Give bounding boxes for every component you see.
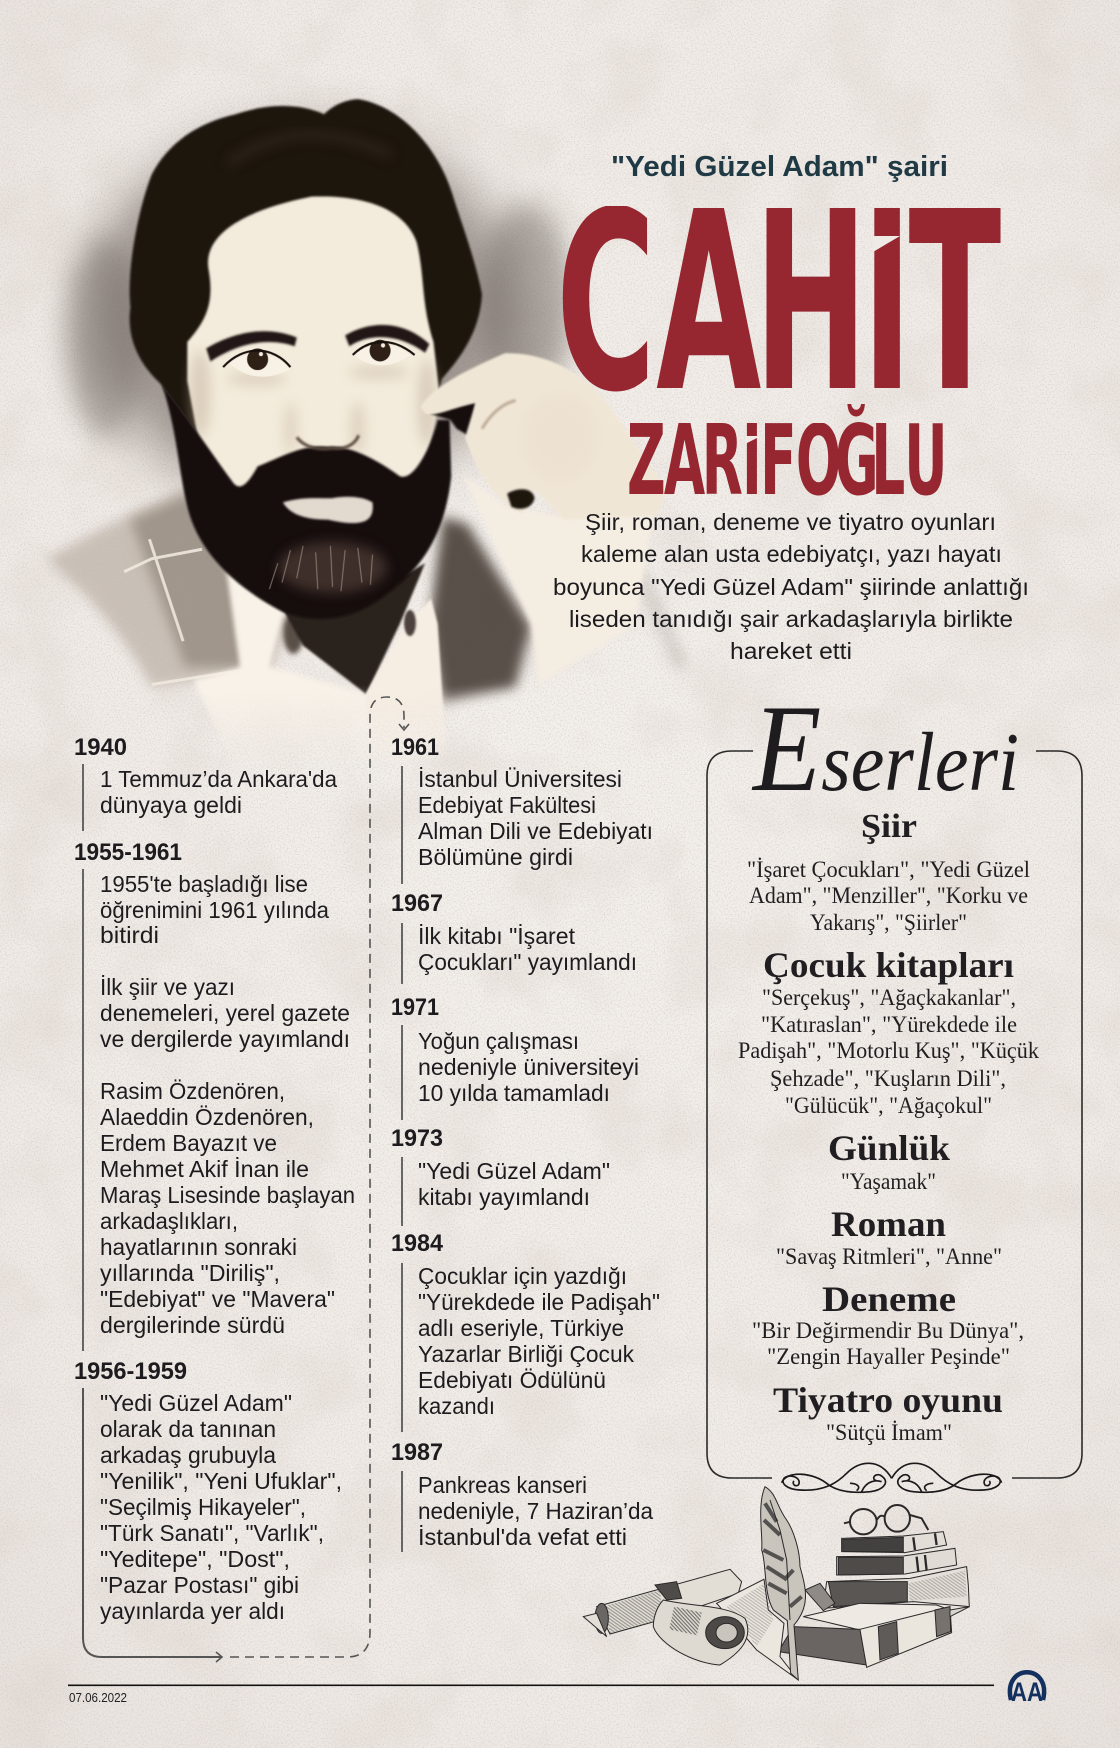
book stack <box>823 1532 969 1608</box>
timeline column 2 <box>391 734 660 1552</box>
entry 1955-1961: Rasim Özdenören, <box>100 1078 285 1104</box>
entry 1955-1961 <box>74 839 355 1351</box>
description: hareket etti <box>730 638 852 664</box>
section: poetry <box>747 808 1030 935</box>
entry 1956-1959: arkadaş grubuyla <box>100 1442 276 1468</box>
lower body fading into the paper <box>46 478 653 744</box>
section: theatre <box>773 1380 1003 1445</box>
description: kaleme alan usta edebiyatçı, yazı hayatı <box>581 541 1002 567</box>
subtitle: "Yedi Güzel Adam" şairi <box>611 151 948 183</box>
entry 1973: 1973 <box>391 1125 443 1152</box>
shirt plaid lines <box>124 538 238 686</box>
panel frame <box>707 751 1082 1478</box>
entry 1955-1961: İlk şiir ve yazı <box>100 974 235 1000</box>
entry 1987 <box>391 1439 653 1552</box>
right vest <box>429 517 531 702</box>
entry 1961: 1961 <box>391 734 439 761</box>
section: essay: "Bir Değirmendir Bu Dünya", <box>752 1318 1024 1343</box>
entry 1967: Çocukları" yayımlandı <box>418 949 637 975</box>
entry 1984: Çocuklar için yazdığı <box>418 1263 627 1289</box>
entry 1971: 10 yılda tamamladı <box>418 1080 610 1106</box>
section: poetry: "İşaret Çocukları", "Yedi Güzel <box>747 857 1030 882</box>
title: surname: ZARİFOĞLU <box>627 404 948 518</box>
entry 1987: Pankreas kanseri <box>418 1472 587 1498</box>
ornament flourish <box>782 1463 1002 1492</box>
section: essay: Deneme <box>822 1279 956 1319</box>
panel heading: Eserleri <box>751 680 1019 817</box>
entry 1955-1961: 1955'te başladığı lise <box>100 871 308 897</box>
entry 1971: nedeniyle üniversiteyi <box>418 1054 639 1080</box>
section: essay <box>752 1279 1024 1369</box>
big book <box>778 1603 969 1667</box>
entry 1940: 1940 <box>74 734 127 761</box>
timeline column 1 <box>74 734 355 1624</box>
section: diary <box>828 1128 950 1194</box>
section: poetry: Adam", "Menziller", "Korku ve <box>749 883 1028 908</box>
entry 1971 <box>391 994 639 1120</box>
entry 1955-1961: dergilerinde sürdü <box>100 1312 285 1338</box>
entry 1955-1961: 1955-1961 <box>74 839 182 866</box>
entry 1955-1961: bitirdi <box>100 922 159 948</box>
entry 1940: 1 Temmuz’da Ankara'da <box>100 766 337 792</box>
portrait <box>46 99 667 771</box>
entry 1955-1961: Alaeddin Özdenören, <box>100 1104 314 1130</box>
description: boyunca "Yedi Güzel Adam" şiirinde anlattığı <box>553 574 1029 600</box>
entry 1956-1959: olarak da tanınan <box>100 1416 276 1442</box>
illustration: scrolls, quill, books and glasses <box>583 1487 969 1680</box>
entry 1971: Yoğun çalışması <box>418 1028 579 1054</box>
grey chin hairs <box>269 541 387 593</box>
forearm <box>463 474 657 685</box>
entry 1984: adlı eseriyle, Türkiye <box>418 1315 624 1341</box>
entry 1955-1961: "Edebiyat" ve "Mavera" <box>100 1286 335 1312</box>
entry 1956-1959: "Yedi Güzel Adam" <box>100 1390 292 1416</box>
entry 1961: Edebiyat Fakültesi <box>418 792 596 818</box>
beard <box>162 385 451 619</box>
entry 1971: 1971 <box>391 994 439 1021</box>
section: poetry: Şiir <box>861 808 917 845</box>
entry 1973: "Yedi Güzel Adam" <box>418 1158 610 1184</box>
entry 1955-1961: denemeleri, yerel gazete <box>100 1000 350 1026</box>
section: essay: "Zengin Hayaller Peşinde" <box>767 1344 1010 1369</box>
entry 1987: nedeniyle, 7 Haziran’da <box>418 1498 653 1524</box>
entry 1967 <box>391 890 637 984</box>
entry 1956-1959 <box>74 1358 342 1624</box>
hair <box>130 99 482 450</box>
entry 1987: 1987 <box>391 1439 443 1466</box>
entry 1961 <box>391 734 653 884</box>
entry 1956-1959: yayınlarda yer aldı <box>100 1598 285 1624</box>
section: children's books: "Serçekuş", "Ağaçkakanlar", <box>762 985 1016 1010</box>
section: theatre: Tiyatro oyunu <box>773 1380 1003 1420</box>
entry 1955-1961: Mehmet Akif İnan ile <box>100 1156 309 1182</box>
entry 1956-1959: "Seçilmiş Hikayeler", <box>100 1494 306 1520</box>
entry 1967: 1967 <box>391 890 443 917</box>
AA logo: AA <box>1011 1677 1043 1707</box>
entry 1956-1959: "Pazar Postası" gibi <box>100 1572 299 1598</box>
entry 1984 <box>391 1230 660 1432</box>
section: novel <box>776 1204 1002 1269</box>
glasses <box>844 1505 928 1534</box>
nose <box>297 435 359 449</box>
section: children's books: Padişah", "Motorlu Kuş", "Küçük <box>738 1038 1039 1063</box>
surname wedge cut <box>745 436 761 444</box>
entry 1955-1961: öğrenimini 1961 yılında <box>100 897 329 923</box>
entry 1961: İstanbul Üniversitesi <box>418 766 622 792</box>
entry 1955-1961: ve dergilerde yayımlandı <box>100 1026 350 1052</box>
face <box>187 196 440 492</box>
scroll front <box>653 1579 798 1680</box>
entry 1967: İlk kitabı "İşaret <box>418 923 576 949</box>
face shading <box>190 351 436 455</box>
entry 1955-1961: Erdem Bayazıt ve <box>100 1130 277 1156</box>
works panel <box>707 680 1082 1478</box>
dark fist gap <box>507 489 535 509</box>
entry 1984: kazandı <box>418 1393 495 1419</box>
section: novel: "Savaş Ritmleri", "Anne" <box>776 1244 1002 1269</box>
lips <box>283 497 373 523</box>
neck shadow <box>282 563 425 694</box>
entry 1987: İstanbul'da vefat etti <box>418 1524 627 1550</box>
timeline connector arrows <box>83 697 409 1662</box>
entry 1973: kitabı yayımlandı <box>418 1184 590 1210</box>
section: children's books: "Gülücük", "Ağaçokul" <box>785 1093 992 1118</box>
entry 1984: "Yürekdede ile Padişah" <box>418 1289 660 1315</box>
section: diary: "Yaşamak" <box>841 1169 936 1194</box>
left shirt front <box>194 572 368 744</box>
entry 1956-1959: "Yenilik", "Yeni Ufuklar", <box>100 1468 342 1494</box>
entry 1961: Alman Dili ve Edebiyatı <box>418 818 653 844</box>
entry 1955-1961: yıllarında "Diriliş", <box>100 1260 280 1286</box>
entry 1956-1959: "Yeditepe", "Dost", <box>100 1546 290 1572</box>
entry 1956-1959: "Türk Sanatı", "Varlık", <box>100 1520 324 1546</box>
title wedge cut <box>873 236 900 252</box>
left vest <box>46 487 290 687</box>
hand <box>420 353 667 520</box>
eye right <box>353 340 415 365</box>
collar shadow <box>283 612 303 654</box>
section: children's books: "Katıraslan", "Yürekdede ile <box>761 1012 1017 1037</box>
entry 1984: 1984 <box>391 1230 444 1257</box>
entry 1956-1959: 1956-1959 <box>74 1358 187 1385</box>
title: first name: CAHİT <box>556 158 1001 447</box>
entry 1940 <box>74 734 337 831</box>
entry 1973 <box>391 1125 610 1226</box>
right collar <box>365 592 444 742</box>
entry 1955-1961: hayatlarının sonraki <box>100 1234 297 1260</box>
quill <box>761 1487 806 1680</box>
description: Şiir, roman, deneme ve tiyatro oyunları <box>585 509 996 535</box>
entry 1940: dünyaya geldi <box>100 792 242 818</box>
section: poetry: Yakarış", "Şiirler" <box>810 910 967 935</box>
scroll back <box>583 1569 742 1637</box>
description <box>553 509 1029 664</box>
entry 1955-1961: arkadaşlıkları, <box>100 1208 238 1234</box>
footer rule <box>68 1684 994 1686</box>
section: children's books: Şehzade", "Kuşların Dili", <box>770 1066 1006 1091</box>
eye left <box>223 348 290 377</box>
date: 07.06.2022 <box>69 1691 127 1705</box>
dark gap behind finger <box>429 403 476 437</box>
entry 1961: Bölümüne girdi <box>418 844 573 870</box>
section: children's books: Çocuk kitapları <box>763 945 1014 985</box>
section: novel: Roman <box>831 1204 946 1244</box>
eyebrows <box>206 331 297 361</box>
section: children's books <box>738 945 1039 1118</box>
entry 1984: Yazarlar Birliği Çocuk <box>418 1341 634 1367</box>
description: liseden tanıdığı şair arkadaşlarıyla birlikte <box>569 606 1013 632</box>
soft shadow halo behind portrait <box>67 129 682 667</box>
section: diary: Günlük <box>828 1128 950 1168</box>
section: theatre: "Sütçü İmam" <box>826 1420 952 1445</box>
entry 1955-1961: Maraş Lisesinde başlayan <box>100 1182 355 1208</box>
entry 1984: Edebiyatı Ödülünü <box>418 1367 606 1393</box>
ink pot <box>805 1583 835 1611</box>
